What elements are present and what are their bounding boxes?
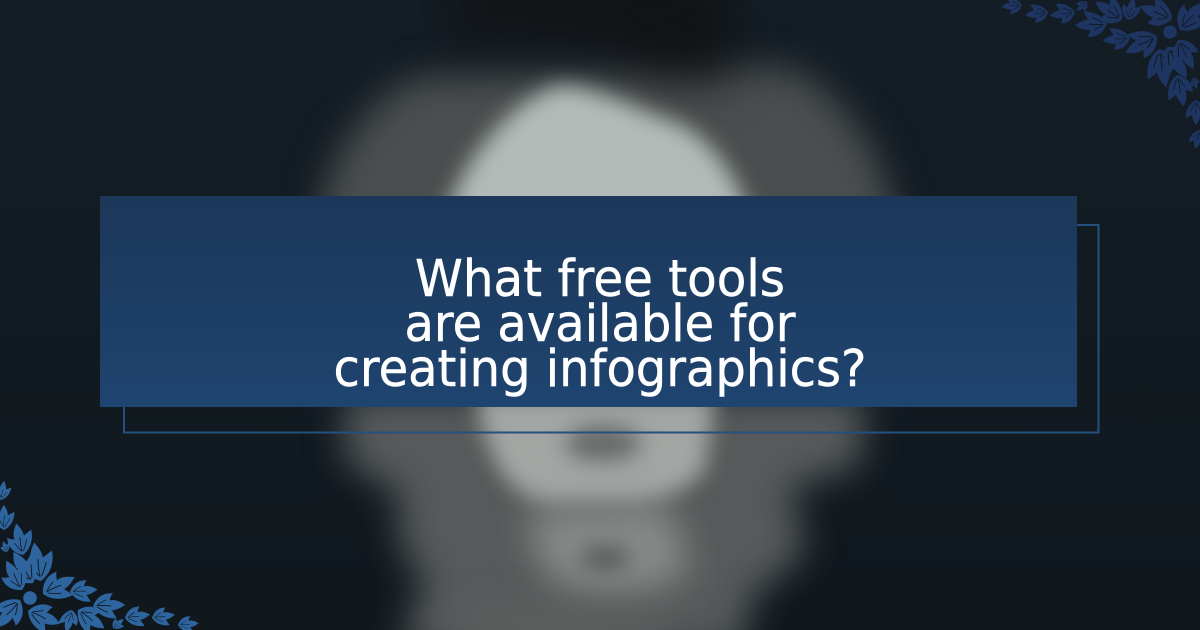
corner ornament: bottom left [0, 480, 199, 630]
title panel [100, 196, 1077, 407]
title [334, 250, 866, 399]
title: creating infographics? [334, 340, 866, 399]
title: What free tools [415, 250, 785, 309]
offset outline frame [124, 225, 1098, 432]
title: are available for [404, 295, 796, 354]
corner ornament: top right [1001, 0, 1200, 150]
